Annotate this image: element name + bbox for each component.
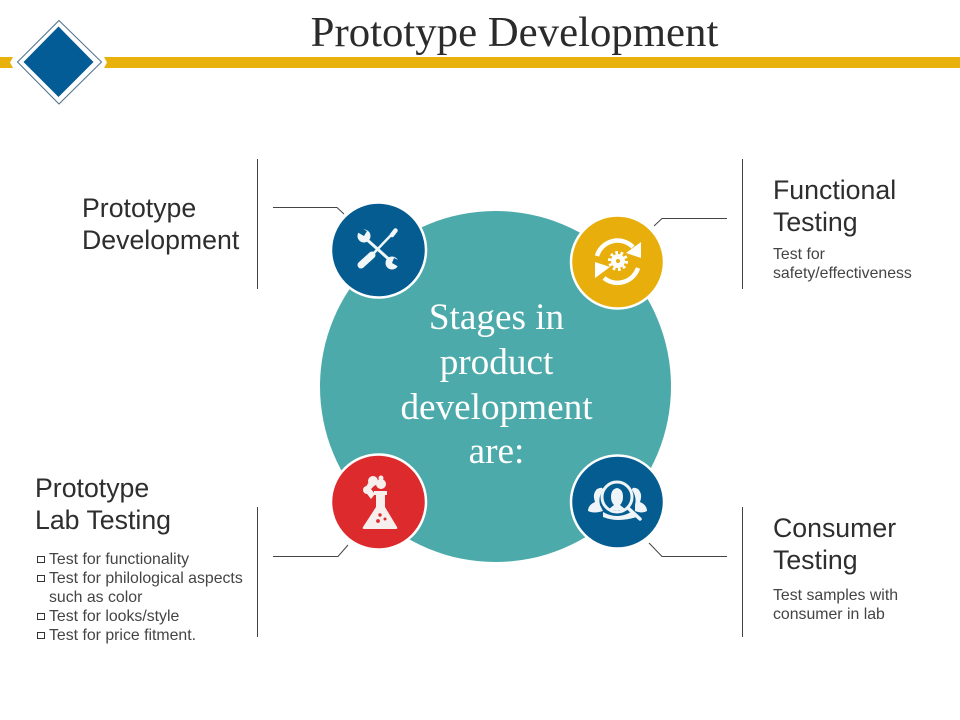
central text: are: [469, 431, 524, 472]
central text [400, 297, 593, 472]
bullet list [38, 551, 243, 644]
panel: prototype lab testing [35, 454, 426, 644]
icon: flask [363, 476, 397, 529]
heading: prototype lab testing: Prototype [35, 473, 149, 503]
description: consumer testing: Test samples with [773, 587, 898, 604]
description: functional testing: Test for [773, 246, 826, 263]
description: functional testing: safety/effectiveness [773, 265, 912, 282]
badge: consumer search [571, 456, 664, 548]
divider and connector [654, 159, 742, 289]
heading: prototype development: Prototype [82, 193, 196, 223]
panel: prototype development [82, 159, 426, 298]
heading: consumer testing: Testing [773, 545, 858, 575]
divider and connector [649, 507, 742, 637]
central text: development [400, 387, 593, 428]
central text: Stages in [429, 297, 565, 338]
panel: consumer testing [571, 456, 898, 637]
badge: lab flask [331, 454, 426, 550]
central text: product [440, 342, 554, 383]
icon: header diamond [18, 20, 102, 104]
bullet list: Test for philological aspects [49, 570, 243, 587]
description: consumer testing: consumer in lab [773, 606, 885, 623]
divider and connector [258, 159, 344, 289]
heading: functional testing: Testing [773, 207, 858, 237]
icon: cycle arrows with gear [595, 241, 641, 283]
divider and connector [258, 507, 348, 637]
panel: functional testing [571, 159, 912, 308]
badge: process gear [571, 216, 664, 308]
bullet list: such as color [49, 589, 143, 606]
heading: consumer testing: Consumer [773, 513, 896, 543]
icon: wrench and screwdriver [357, 228, 400, 270]
heading: functional testing: Functional [773, 175, 896, 205]
icon: people with magnifier [588, 482, 647, 520]
central circle [320, 211, 671, 562]
bullet list: Test for functionality [49, 551, 189, 568]
bullet list: Test for price fitment. [49, 627, 196, 644]
badge: tools [331, 202, 426, 298]
heading: prototype development: Development [82, 225, 240, 255]
header band [0, 57, 960, 68]
bullet list: Test for looks/style [49, 608, 180, 625]
title: Prototype Development [311, 9, 718, 56]
heading: prototype lab testing: Lab Testing [35, 505, 171, 535]
